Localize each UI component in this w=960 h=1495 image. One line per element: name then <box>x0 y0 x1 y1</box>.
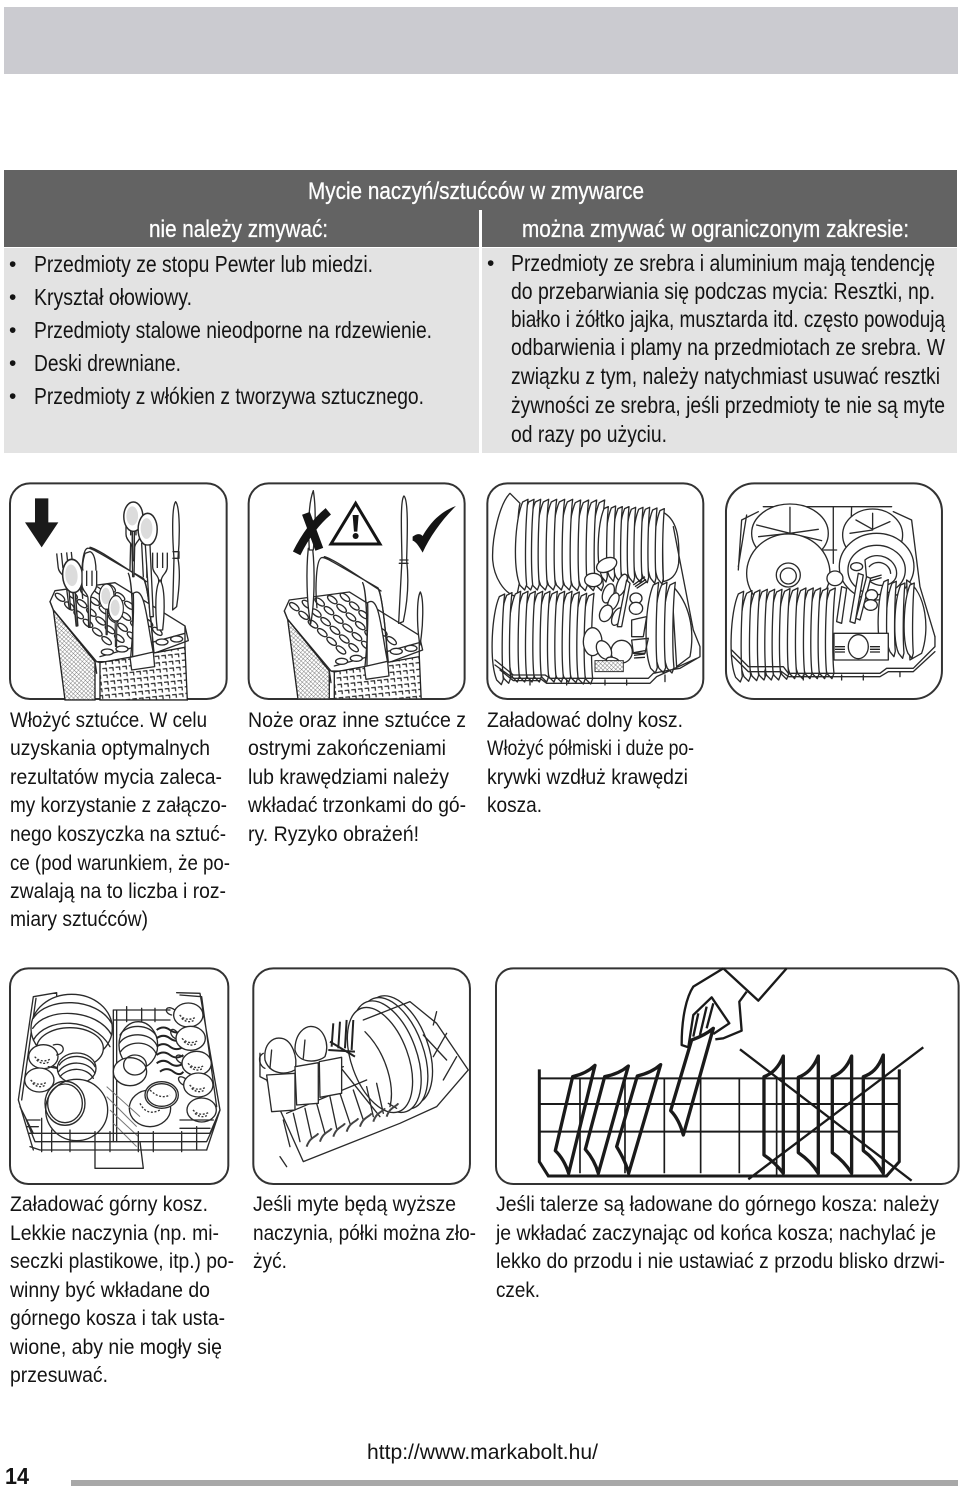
text: insert cutlery: ce (pod warunkiem, że po- <box>10 852 230 875</box>
text: insert cutlery: my korzystanie z załączo- <box>10 794 227 817</box>
correctly placed plates <box>555 1065 661 1173</box>
left column: not washable: Przedmioty ze stopu Pewter lub miedzi. <box>34 251 373 277</box>
text: taller dishes: Jeśli myte będą wyższe <box>253 1193 456 1216</box>
rack grid <box>539 1069 899 1177</box>
text: lower rack <box>487 709 694 817</box>
text: knives warning: wkładać trzonkami do gó- <box>247 794 466 817</box>
cross out <box>740 1047 923 1181</box>
text: plates in upper rack <box>495 1193 945 1302</box>
panel: upper rack top view <box>10 968 228 1184</box>
text: insert cutlery: miary sztućców) <box>10 908 148 931</box>
text: upper rack <box>9 1193 234 1387</box>
text: knives warning: ostrymi zakończeniami <box>248 737 446 760</box>
hand <box>682 968 787 1047</box>
panel: cutlery basket <box>10 483 227 700</box>
left column: not washable: • <box>9 286 16 309</box>
left column: not washable: nie należy zmywać: <box>149 216 328 243</box>
text: insert cutlery: nego koszyczka na sztuć- <box>10 823 226 846</box>
text: taller dishes <box>253 1193 476 1273</box>
text: lower rack: krywki wzdłuż krawędzi <box>487 766 688 789</box>
table title row <box>4 170 957 210</box>
panel: lower rack loading <box>487 483 703 699</box>
plates bottom row <box>492 582 692 685</box>
left column: not washable: Przedmioty z włókien z tworzywa sztucznego. <box>34 383 424 409</box>
cups left <box>25 1044 63 1092</box>
text: insert cutlery: Włożyć sztućce. W celu <box>10 709 207 732</box>
right column: limited washing: od razy po użyciu. <box>511 421 667 447</box>
left column: not washable: • <box>9 352 16 375</box>
knife handle down and wrong knife <box>307 491 423 645</box>
text: plates in upper rack: czek. <box>496 1279 540 1302</box>
rack rails <box>732 637 935 680</box>
text: lower rack: Włożyć półmiski i duże po- <box>487 737 694 760</box>
top platter <box>752 504 828 563</box>
text: knives warning <box>247 709 466 846</box>
text: knives warning: ry. Ryzyko obrażeń! <box>248 823 419 846</box>
footer bar <box>71 1480 958 1486</box>
top right plate <box>843 509 903 561</box>
top grey header bar <box>4 7 958 74</box>
icon: check mark <box>413 506 456 553</box>
cups and glasses <box>260 1026 342 1112</box>
big platter <box>493 493 520 597</box>
left column: not washable: Kryształ ołowiowy. <box>34 284 192 310</box>
text: upper rack: przesuwać. <box>10 1364 108 1387</box>
icon: warning triangle <box>331 503 380 544</box>
cutlery centre <box>583 554 648 672</box>
right plate <box>839 533 914 600</box>
diagonal wires <box>107 1087 140 1147</box>
text: upper rack: winny być wkładane do <box>9 1279 210 1302</box>
text: knives warning: lub krawędziami należy <box>248 766 449 789</box>
small plates <box>57 1053 96 1084</box>
saucers centre <box>119 1022 158 1068</box>
text: insert cutlery: uzyskania optymalnych <box>10 737 210 760</box>
text: upper rack: Załadować górny kosz. <box>10 1193 208 1216</box>
right column: limited washing <box>482 210 957 453</box>
panel: upper rack plates diagram <box>496 968 959 1184</box>
left column: not washable <box>4 210 479 453</box>
cutlery centre <box>827 563 888 660</box>
left column: not washable: • <box>9 253 16 276</box>
cutlery in basket <box>57 502 179 646</box>
text: lower rack: Załadować dolny kosz. <box>487 709 683 732</box>
text: taller dishes: żyć. <box>253 1250 287 1273</box>
plates <box>335 986 446 1122</box>
page number: 14 <box>5 1463 29 1489</box>
icon: cross <box>297 511 328 553</box>
large bowl <box>45 1079 108 1141</box>
plate held by hand <box>671 1028 713 1135</box>
wave wires <box>157 1027 183 1074</box>
rack rails <box>495 527 700 685</box>
table: dishwasher items <box>4 170 957 453</box>
stacked plates <box>31 994 112 1069</box>
large plate <box>747 534 830 613</box>
panel: upper rack side view <box>253 968 470 1184</box>
text: insert cutlery <box>10 709 230 931</box>
right column: limited washing: • <box>487 252 494 275</box>
plates top row <box>515 499 679 591</box>
rack wires <box>260 1002 468 1162</box>
tines <box>328 1020 355 1057</box>
left column: not washable: Przedmioty stalowe nieodporne na rdzewienie. <box>34 317 432 343</box>
icon: down arrow <box>25 498 58 547</box>
panel: knives warning <box>249 483 465 709</box>
text: upper rack: seczki plastikowe, itp.) po- <box>10 1250 234 1273</box>
text: knives warning: Noże oraz inne sztućce z <box>248 709 466 732</box>
left column: not washable: Deski drewniane. <box>34 350 181 376</box>
text: upper rack: górnego kosza i tak usta- <box>10 1307 225 1330</box>
text: upper rack: wione, aby nie mogły się <box>9 1336 222 1359</box>
right column: limited washing: można zmywać w ograniczonym zakresie: <box>522 216 909 243</box>
rack back <box>738 507 935 637</box>
left column: not washable: • <box>9 385 16 408</box>
plates row <box>731 580 926 682</box>
front rails <box>20 1107 220 1168</box>
text: plates in upper rack: je wkładać zaczynając od końca kosza; nachylać je <box>495 1222 936 1245</box>
bowls centre <box>113 1055 178 1127</box>
table title row: Mycie naczyń/sztućców w zmywarce <box>308 178 644 205</box>
text: lower rack: kosza. <box>487 794 542 817</box>
text: insert cutlery: zwalają na to liczba i roz- <box>10 880 226 903</box>
cups right <box>166 1003 216 1122</box>
incorrectly placed plates <box>764 1055 883 1173</box>
text: upper rack: Lekkie naczynia (np. mi- <box>10 1222 219 1245</box>
panel: lower rack large plates <box>726 483 942 699</box>
text: insert cutlery: rezultatów mycia zaleca- <box>10 766 222 789</box>
footer url: http://www.markabolt.hu/ <box>367 1441 598 1464</box>
left column: not washable: • <box>9 319 16 342</box>
rack back wires <box>18 993 220 1150</box>
text: taller dishes: naczynia, półki można zło- <box>253 1222 476 1245</box>
